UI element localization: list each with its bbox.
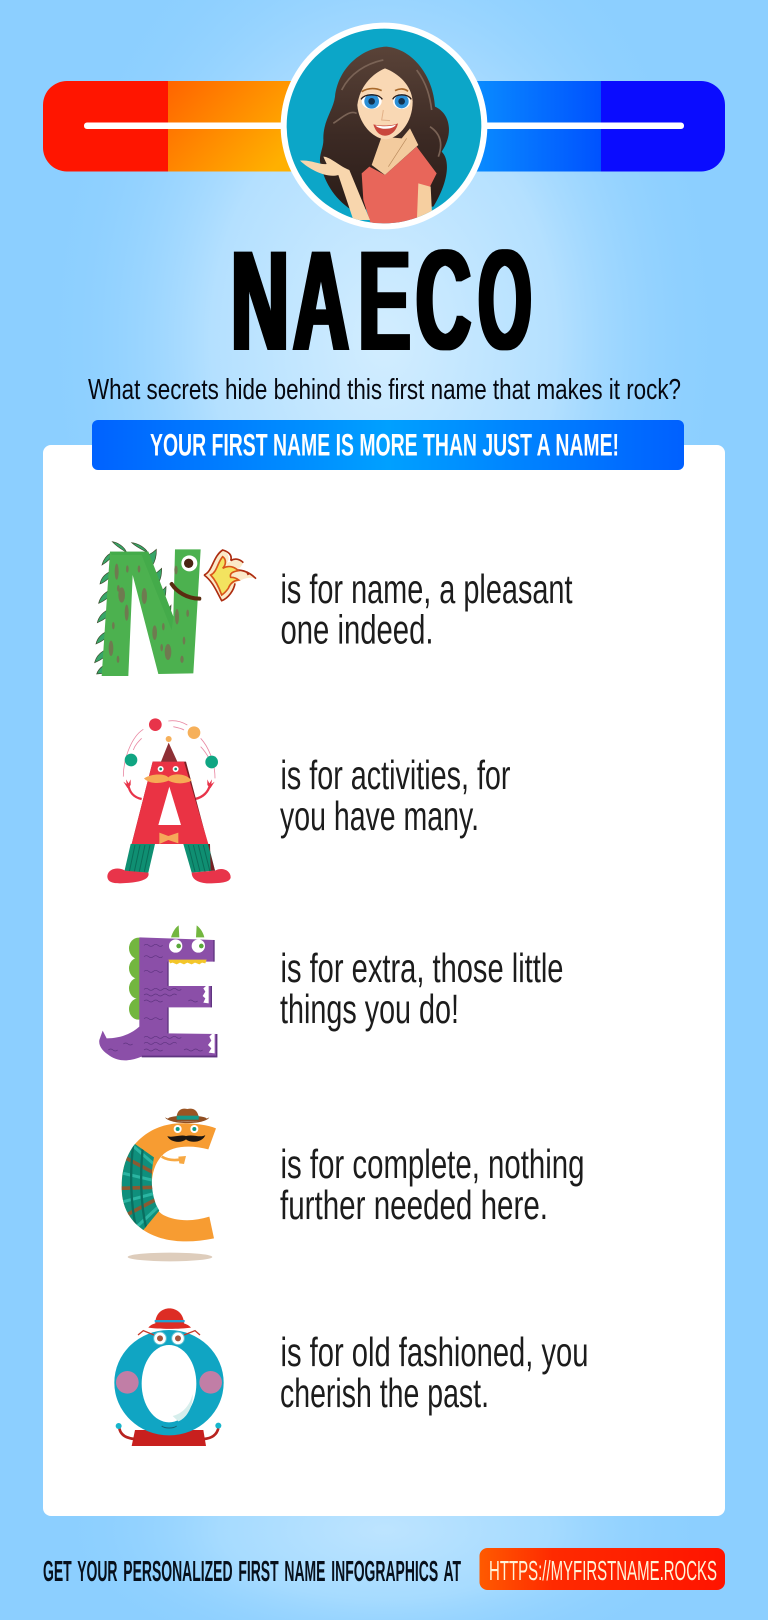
header colour bar — [43, 81, 725, 172]
arms — [119, 1428, 218, 1439]
row O text — [280, 1329, 588, 1416]
row A text — [280, 752, 510, 839]
title: C — [416, 221, 471, 380]
cheeks — [116, 1371, 139, 1394]
spikes — [95, 542, 171, 674]
eyes — [362, 94, 382, 109]
eyes — [169, 939, 182, 953]
arm — [162, 1157, 182, 1160]
legs — [124, 844, 155, 873]
row A text: you have many. — [280, 793, 479, 839]
bow tie — [159, 833, 178, 844]
banner — [92, 420, 684, 470]
scale lines — [108, 944, 203, 1051]
row O text: is for old fashioned, you — [280, 1329, 588, 1375]
face — [357, 68, 413, 139]
smile — [162, 1426, 177, 1428]
infographic canvas: O — [478, 221, 531, 380]
letter C: cowboy — [113, 1109, 216, 1261]
horns — [171, 925, 204, 937]
hair — [320, 47, 449, 210]
letter N: green dragon — [95, 542, 256, 676]
plaid sleeve — [122, 1144, 160, 1230]
eyes — [158, 766, 164, 772]
balls — [149, 718, 162, 731]
row N text: is for name, a pleasant — [280, 566, 573, 612]
hat — [161, 743, 177, 762]
neck and chest — [372, 128, 418, 175]
juggling arcs — [123, 721, 215, 778]
arms — [128, 785, 210, 799]
base — [132, 1430, 206, 1446]
mouth — [373, 123, 398, 136]
spots — [109, 564, 189, 663]
row E text — [280, 945, 564, 1032]
row O text: cherish the past. — [280, 1370, 489, 1416]
letter E: purple dragon — [99, 925, 217, 1060]
row C text: is for complete, nothing — [280, 1141, 584, 1187]
shadow — [128, 1253, 212, 1261]
shoes — [107, 869, 149, 883]
glasses — [138, 1331, 200, 1335]
title: A — [293, 222, 349, 381]
row N text: one indeed. — [280, 606, 434, 652]
teeth — [168, 960, 207, 964]
body — [99, 937, 217, 1060]
title: N — [231, 222, 289, 381]
title — [231, 221, 531, 381]
body ring — [114, 1330, 224, 1435]
shirt — [362, 147, 437, 227]
belt mouth — [172, 584, 199, 599]
moustache — [167, 1135, 205, 1142]
avatar: woman in circle — [281, 23, 487, 229]
white content panel — [43, 445, 725, 1516]
body — [102, 549, 201, 676]
fire — [204, 550, 256, 601]
letter A: clown — [107, 718, 231, 883]
back humps — [129, 938, 148, 1020]
title: E — [358, 222, 410, 381]
hat — [165, 1117, 209, 1123]
letter O: bowler hat — [114, 1308, 224, 1446]
body — [122, 1123, 216, 1241]
row E text: things you do! — [280, 986, 459, 1032]
moustache — [144, 774, 192, 783]
hat — [148, 1308, 191, 1329]
arm and hand — [300, 157, 370, 220]
row C text: further needed here. — [280, 1182, 548, 1228]
row A text: is for activities, for — [280, 752, 510, 798]
footer url button — [480, 1548, 725, 1590]
row E text: is for extra, those little — [280, 945, 564, 991]
eyes — [174, 1125, 182, 1133]
row N text — [280, 566, 573, 652]
eye — [181, 555, 197, 571]
right arm — [416, 183, 432, 218]
row C text — [280, 1141, 584, 1228]
body — [132, 762, 215, 871]
